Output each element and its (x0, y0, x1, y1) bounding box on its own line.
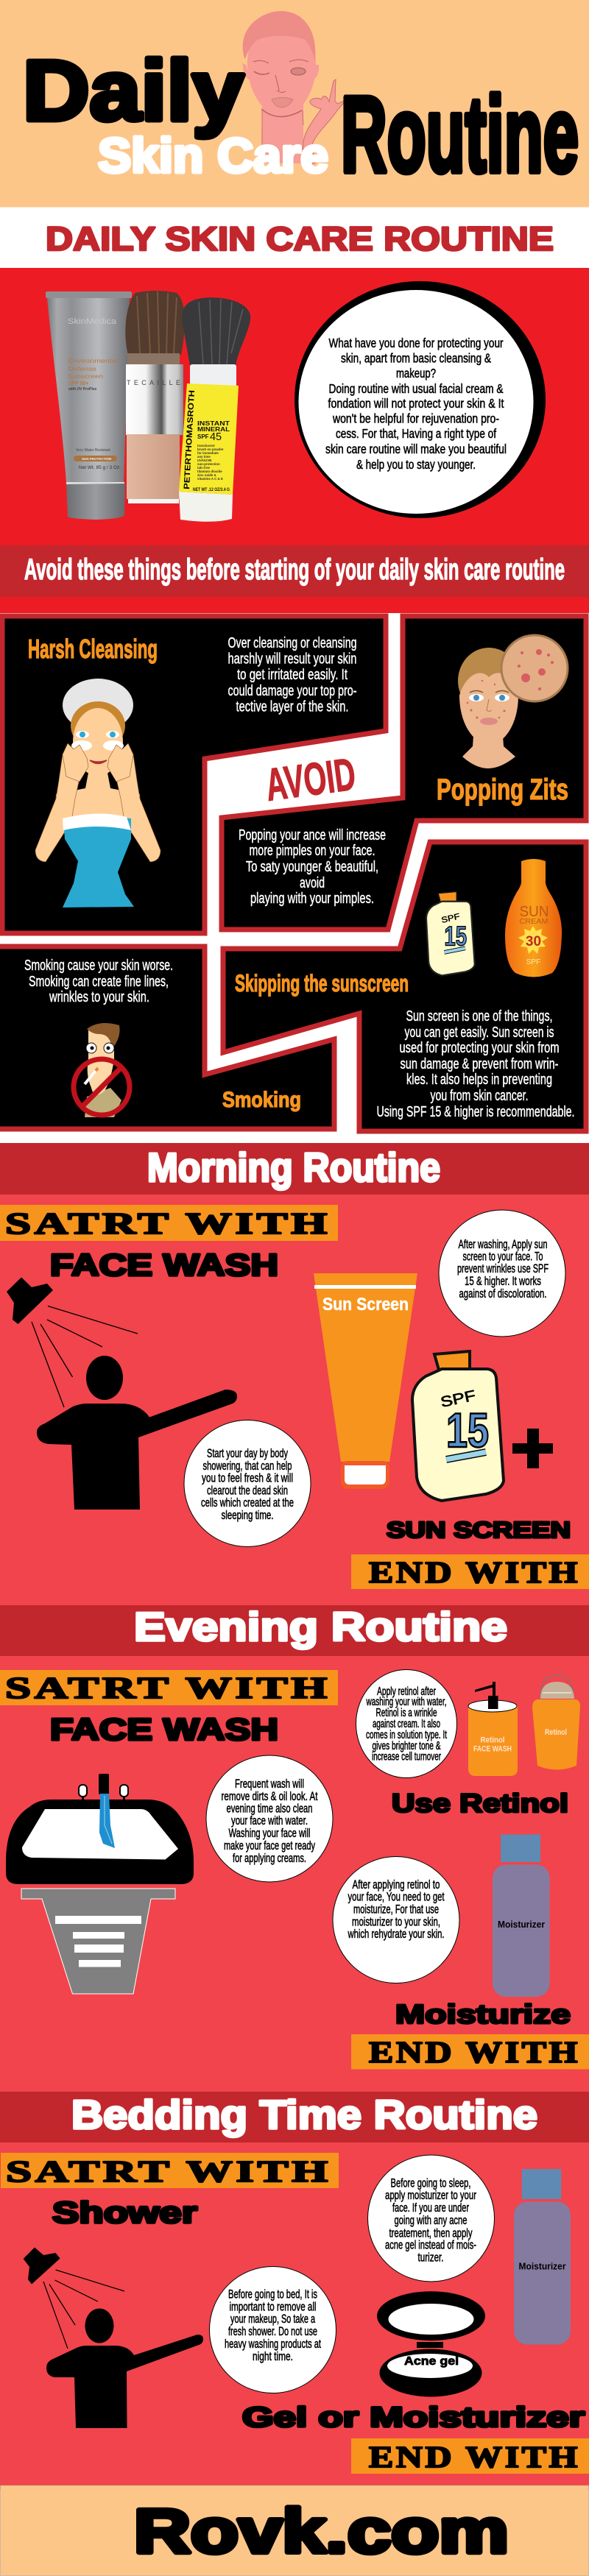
callout: before going to bed: fresh shower. Do not use (228, 2324, 317, 2338)
text: smoking description: wrinkles to your skin. (49, 989, 149, 1005)
text: smoking description (24, 958, 173, 1005)
icon: SPF 15 bottle (412, 1351, 504, 1501)
section: evening routine (0, 1604, 589, 2070)
callout: before going to sleep: apply moisturizer to your (385, 2188, 476, 2202)
section: morning routine (0, 1143, 589, 1589)
icon: woman washing her face (35, 679, 161, 907)
product: mineral powder brush (179, 297, 250, 522)
band: Morning Routine heading: Morning Routine (147, 1144, 440, 1190)
product: mineral powder brush: PETERTHOMASROTH (183, 390, 197, 489)
icon: retinol face wash pump bottle: FACE WASH (473, 1745, 512, 1754)
icon: SPF 15 bottle: SPF (439, 1387, 477, 1411)
icon: sun cream bottle (505, 859, 562, 977)
product: mineral powder brush: zinc oxide & (197, 473, 216, 477)
icon: SPF 15 bottle small: SPF (440, 912, 461, 925)
icon: retinol face wash pump bottle (468, 1682, 518, 1776)
label: start with (0, 1205, 338, 1241)
title: Skin Care: Skin Care (98, 128, 328, 183)
heading: Moisturize: Moisturize (395, 1999, 571, 2029)
text: harsh cleansing description: could damage your top pro- (228, 683, 356, 699)
band: Evening Routine heading (0, 1604, 589, 1656)
callout: apply sun screen: screen to your face. To (462, 1250, 543, 1264)
text: sunscreen description: you from skin cancer. (430, 1088, 529, 1104)
callout: intro text bubble: What have you done for protecting your (328, 336, 504, 350)
callout: apply retinol (356, 1669, 456, 1778)
product: sunscreen tube: SkinMedica (68, 317, 117, 326)
callout: after applying retinol (333, 1856, 459, 1983)
heading: Use Retinol: Use Retinol (392, 1789, 568, 1818)
icon: retinol face wash pump bottle: Retinol (480, 1736, 505, 1745)
icon: wash basin (6, 1774, 194, 1994)
callout: intro text bubble: cess. For that, Having a right type of (336, 426, 496, 441)
callout: intro text bubble: Doing routine with usual facial cream & (328, 381, 504, 396)
label: end with: END WITH (369, 2440, 580, 2474)
text: popping description: To saty younger & beautiful, (246, 859, 378, 875)
text: smoking description: Smoking can create fine lines, (29, 974, 169, 990)
title: Daily: Daily (23, 43, 244, 138)
footer: Rovk.com (134, 2497, 509, 2566)
product: sunscreen tube: Environmental (68, 358, 118, 364)
product: mineral powder brush: brush on powder (197, 447, 224, 451)
callout: frequent wash (206, 1755, 333, 1882)
product: mineral powder brush: vitamins A C & E (197, 477, 223, 481)
callout: apply retinol: gives brighter tone & (373, 1740, 441, 1752)
illustration: winking woman's face (241, 11, 346, 166)
callout: before going to bed (209, 2267, 336, 2393)
product: mineral powder brush: sun-protection (197, 462, 220, 466)
product: powder brush (125, 291, 185, 503)
text: sunscreen description (377, 1008, 574, 1120)
product: sunscreen tube: SPF 50+ (68, 381, 88, 386)
label: start with: SATRT WITH (6, 2154, 331, 2188)
product: mineral powder brush: MINERAL (197, 426, 230, 433)
icon: plus sign (512, 1429, 553, 1468)
icon: moisturizer bottle (514, 2169, 571, 2345)
callout: before going to bed: heavy washing products at (225, 2337, 321, 2351)
product: mineral powder brush: for immediate (197, 451, 219, 455)
icon: sun screen tube (314, 1273, 417, 1489)
text: popping description: playing with your pimples. (250, 891, 374, 907)
panel: popping zits (222, 616, 586, 930)
footer (0, 2485, 589, 2576)
callout: apply retinol: increase cell turnover (372, 1751, 441, 1763)
product: mineral powder brush: any time (197, 455, 211, 459)
callout: frequent wash: remove dirts & oil look. At (221, 1789, 318, 1803)
callout: apply retinol: washing your with water, (366, 1696, 446, 1708)
callout: before going to sleep: face. If you are under (392, 2201, 469, 2215)
product: mineral powder brush: talc-free (197, 466, 211, 470)
panel: smoking (0, 946, 334, 1129)
heading: Sun Screen: SUN SCREEN (387, 1517, 571, 1543)
section: bedding time routine (0, 2092, 589, 2474)
callout: frequent wash: Washing your face will (228, 1826, 311, 1840)
callout: before going to bed: Before going to bed, It is (228, 2287, 317, 2301)
callout: intro text bubble: skin, apart from basic cleansing & (341, 350, 491, 365)
text: harsh cleansing description: tective layer of the skin. (236, 699, 349, 715)
icon: retinol cream jar (532, 1675, 580, 1769)
page background: coral (0, 1195, 589, 2490)
heading band: Daily Skin Care Routine: DAILY SKIN CARE ROUTINE (46, 220, 554, 258)
callout: intro text bubble (294, 281, 546, 518)
callout: intro text bubble: won't be helpful for rejuvenation pro- (332, 411, 499, 425)
product: sunscreen tube: Net Wt. 85 g / 3 Oz. (79, 465, 121, 470)
callout: apply sun screen (439, 1210, 565, 1337)
callout: before going to bed: night time. (253, 2349, 293, 2363)
product: sunscreen tube: SUN PROTECTION (82, 457, 111, 461)
product: sunscreen tube: Defense (68, 366, 97, 372)
band: Bedding Time Routine heading (0, 2092, 589, 2142)
product: mineral powder brush: UVA/UVB (197, 459, 211, 462)
callout: apply sun screen: 15 & higher. It works (465, 1274, 541, 1288)
product: powder brush: TECAILLE (127, 379, 180, 386)
callout: after applying retinol: moisturizer to your skin, (352, 1915, 440, 1928)
product: mineral powder brush: INSTANT (197, 420, 230, 427)
text: harsh cleansing description: to get irritated easily. It (237, 667, 348, 683)
product: sunscreen tube (46, 291, 132, 520)
label: start with: SATRT WITH (5, 1671, 331, 1705)
callout: apply retinol: Apply retinol after (377, 1685, 436, 1698)
callout: start your day: sleeping time. (221, 1508, 274, 1522)
icon: SPF 15 bottle: 15 (446, 1403, 489, 1457)
icon: person under shower (7, 1278, 237, 1510)
callout: frequent wash: your face with water. (231, 1814, 308, 1827)
callout: frequent wash: make your face get ready (224, 1839, 315, 1853)
icon: SPF 15 bottle small: 15 (444, 920, 467, 952)
icon: no smoking man (74, 1023, 130, 1117)
callout: before going to sleep: acne gel instead of mois- (385, 2238, 476, 2252)
label: end with: END WITH (369, 1555, 580, 1589)
heading: Shower: Shower (52, 2195, 197, 2229)
heading: Gel or Moisturizer: Gel or Moisturizer (242, 2402, 585, 2433)
callout: intro text bubble: & help you to stay younger. (356, 457, 476, 472)
icon: sun screen tube: Sun Screen (322, 1295, 409, 1314)
callout: start your day: clearout the dead skin (207, 1484, 288, 1497)
product: sunscreen tube: with UV ProPlex (68, 387, 97, 392)
icon: moisturizer bottle: Moisturizer (498, 1919, 545, 1930)
text: harsh cleansing description (228, 635, 356, 715)
callout: start your day: Start your day by body (207, 1446, 288, 1460)
heading: Face Wash: FACE WASH (50, 1712, 278, 1747)
text: harsh cleansing description: Over cleansing or cleansing (228, 635, 356, 651)
panel: introduction (0, 268, 589, 546)
icon: sun cream bottle: SPF (526, 958, 540, 966)
band: Bedding Time Routine heading: Bedding Time Routine (71, 2092, 537, 2137)
panel: harsh cleansing (2, 616, 386, 933)
callout: before going to sleep: Before going to sleep, (390, 2176, 471, 2190)
banner: avoid these things (0, 545, 589, 597)
product: mineral powder brush: translucent (197, 444, 215, 447)
callout: apply retinol: comes in solution type. It (366, 1729, 447, 1741)
callout: intro text bubble: fondation will not protect your skin & It (328, 396, 504, 411)
icon: sun cream bottle: CREAM (520, 917, 548, 926)
callout: before going to bed: important to remove all (230, 2299, 317, 2313)
icon: sun cream bottle: 30 (526, 934, 541, 949)
text: popping description: Popping your ance will increase (239, 827, 386, 843)
text: harsh cleansing description: harshly will result your skin (228, 651, 356, 667)
callout: after applying retinol: your face, You need to get (348, 1890, 445, 1903)
label: start with (0, 1670, 338, 1705)
callout: intro text bubble: skin care routine will make you beautiful (325, 442, 507, 456)
panel: skipping the sunscreen (223, 842, 586, 1131)
header banner (0, 0, 589, 208)
callout: apply retinol: against cream. It also (373, 1718, 440, 1730)
callout: before going to sleep (368, 2155, 495, 2282)
callout: before going to sleep: turizer. (418, 2250, 443, 2264)
icon: retinol cream jar: Retinol (545, 1728, 567, 1737)
heading: AVOID: AVOID (263, 749, 359, 811)
product: mineral powder brush: titanium dioxide (197, 470, 222, 473)
heading: Smoking: Smoking (222, 1088, 301, 1112)
callout: intro text bubble: makeup? (396, 366, 436, 381)
icon: SPF 15 bottle small (426, 891, 475, 975)
icon: person under shower (24, 2248, 203, 2428)
panel: avoid section (0, 597, 589, 1143)
text: popping description: avoid (300, 875, 325, 891)
callout: after applying retinol: which rehydrate your skin. (348, 1927, 445, 1941)
callout: after applying retinol: After applying retinol to (352, 1878, 440, 1892)
heading: Face Wash: FACE WASH (50, 1248, 278, 1282)
product: mineral powder brush: 45 (210, 431, 222, 443)
product: mineral powder brush: NET WT .12 OZ/3.4 G (193, 487, 230, 492)
product: mineral powder brush: SPF (197, 434, 209, 440)
icon: face with acne (458, 635, 568, 768)
callout: frequent wash: for applying creams. (233, 1851, 306, 1865)
callout: apply retinol: Retinol is a wrinkle (375, 1707, 437, 1719)
label: end with: END WITH (369, 2035, 580, 2069)
text: smoking description: Smoking cause your skin worse. (24, 958, 173, 974)
band: Evening Routine heading: Evening Routine (134, 1604, 507, 1649)
band: Morning Routine heading (0, 1143, 589, 1195)
heading: Skipping the sunscreen: Skipping the sunscreen (235, 970, 409, 997)
callout: frequent wash: evening time also clean (227, 1802, 312, 1816)
callout: before going to sleep: going with any acne (395, 2213, 467, 2227)
callout: apply sun screen: against of discoloration. (459, 1287, 546, 1301)
callout: start your day: showering, that can help (203, 1459, 292, 1473)
icon: sun cream bottle: SUN (520, 904, 549, 920)
icon: acne gel compact (377, 2291, 485, 2396)
label: start with (1, 2153, 339, 2188)
icon: moisturizer bottle: Moisturizer (518, 2260, 565, 2271)
label: start with: SATRT WITH (5, 1206, 331, 1240)
icon: acne gel compact: Acne gel (404, 2355, 459, 2368)
heading band: Daily Skin Care Routine (0, 208, 589, 268)
callout: start your day (184, 1420, 311, 1547)
callout: start your day: you to feel fresh & it will (202, 1471, 293, 1485)
product: sunscreen tube: Very Water Resistant (76, 448, 110, 453)
text: popping description (239, 827, 386, 907)
callout: before going to sleep: treatement, then apply (389, 2226, 473, 2240)
callout: start your day: cells which created at the (201, 1496, 294, 1510)
callout: frequent wash: Frequent wash will (235, 1777, 304, 1791)
callout: after applying retinol: moisturize, For that use (353, 1902, 439, 1917)
icon: moisturizer bottle (493, 1834, 549, 1997)
product: sunscreen tube: Sunscreen (68, 373, 103, 380)
heading: Harsh Cleansing: Harsh Cleansing (28, 634, 158, 664)
text: popping description: more pimples on your face. (249, 843, 375, 859)
callout: before going to bed: your makeup, So take a (230, 2312, 315, 2326)
